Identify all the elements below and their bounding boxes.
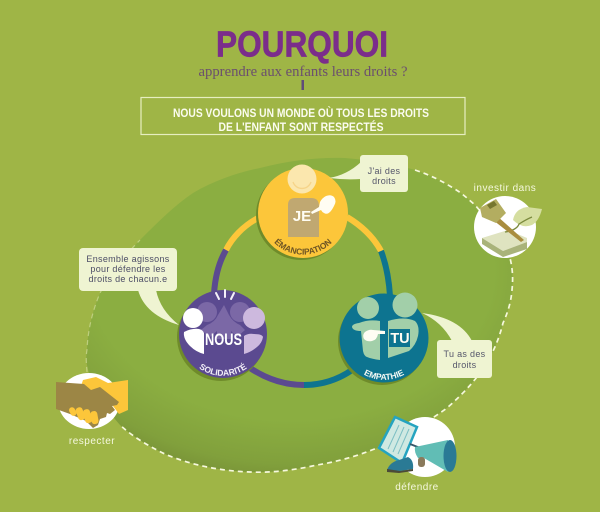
callout: Ensemble agissons: pour défendre les <box>90 264 166 274</box>
label: empathie: EMPATHIE <box>364 370 404 380</box>
central green ellipse <box>86 158 513 472</box>
icon: défendre megaphone <box>379 417 456 493</box>
icon: child body <box>288 198 319 237</box>
callout: Ensemble agissons: Ensemble agissons <box>86 254 170 264</box>
badge: JE émancipation <box>256 164 348 260</box>
callout: J'ai des droits <box>329 155 408 192</box>
badge: NOUS solidarité <box>177 289 267 381</box>
icon: child head <box>288 164 316 194</box>
label: TU: TU <box>390 331 410 347</box>
icon: lilac figure <box>243 307 265 354</box>
icon: pointing hand <box>363 330 385 341</box>
label: émancipation: ÉMANCIPATION <box>274 238 332 255</box>
icon: TU backing <box>389 329 410 347</box>
icon: burst lines <box>216 290 234 299</box>
icon: left figure <box>352 297 380 360</box>
badge: TU empathie <box>338 292 428 385</box>
connecting ring arcs <box>214 217 390 385</box>
subtitle: apprendre aux enfants leurs droits ? <box>198 64 408 80</box>
callout: Ensemble agissons: droits de chacun.e <box>89 274 167 284</box>
mission statement box: DE L'ENFANT SONT RESPECTÉS <box>218 119 384 134</box>
connector tick <box>302 80 304 90</box>
title: POURQUOI <box>216 24 388 64</box>
icon: pointing hand <box>311 195 336 214</box>
label: respecter: respecter <box>69 436 115 447</box>
callout: Ensemble agissons <box>79 248 179 325</box>
label: NOUS: NOUS <box>205 331 242 349</box>
label: défendre: défendre <box>395 482 439 493</box>
callout: Tu as des droits: Tu as des <box>444 349 486 359</box>
label: investir dans: investir dans <box>474 183 536 194</box>
callout: J'ai des droits: droits <box>372 176 396 186</box>
callout: Tu as des droits: droits <box>453 360 477 370</box>
icon: white figure <box>183 308 204 354</box>
callout: Tu as des droits <box>422 313 492 378</box>
icon: respecter handshake <box>56 373 128 447</box>
label: JE: JE <box>293 208 311 225</box>
label: solidarité: SOLIDARITÉ <box>200 362 247 376</box>
icon: raised hands <box>197 302 250 339</box>
mission statement box <box>141 98 465 134</box>
icon: right figure <box>388 292 419 358</box>
mission statement box: NOUS VOULONS UN MONDE OÙ TOUS LES DROITS <box>173 105 429 120</box>
icon: investir dans <box>474 183 542 258</box>
callout: J'ai des droits: J'ai des <box>368 166 401 176</box>
